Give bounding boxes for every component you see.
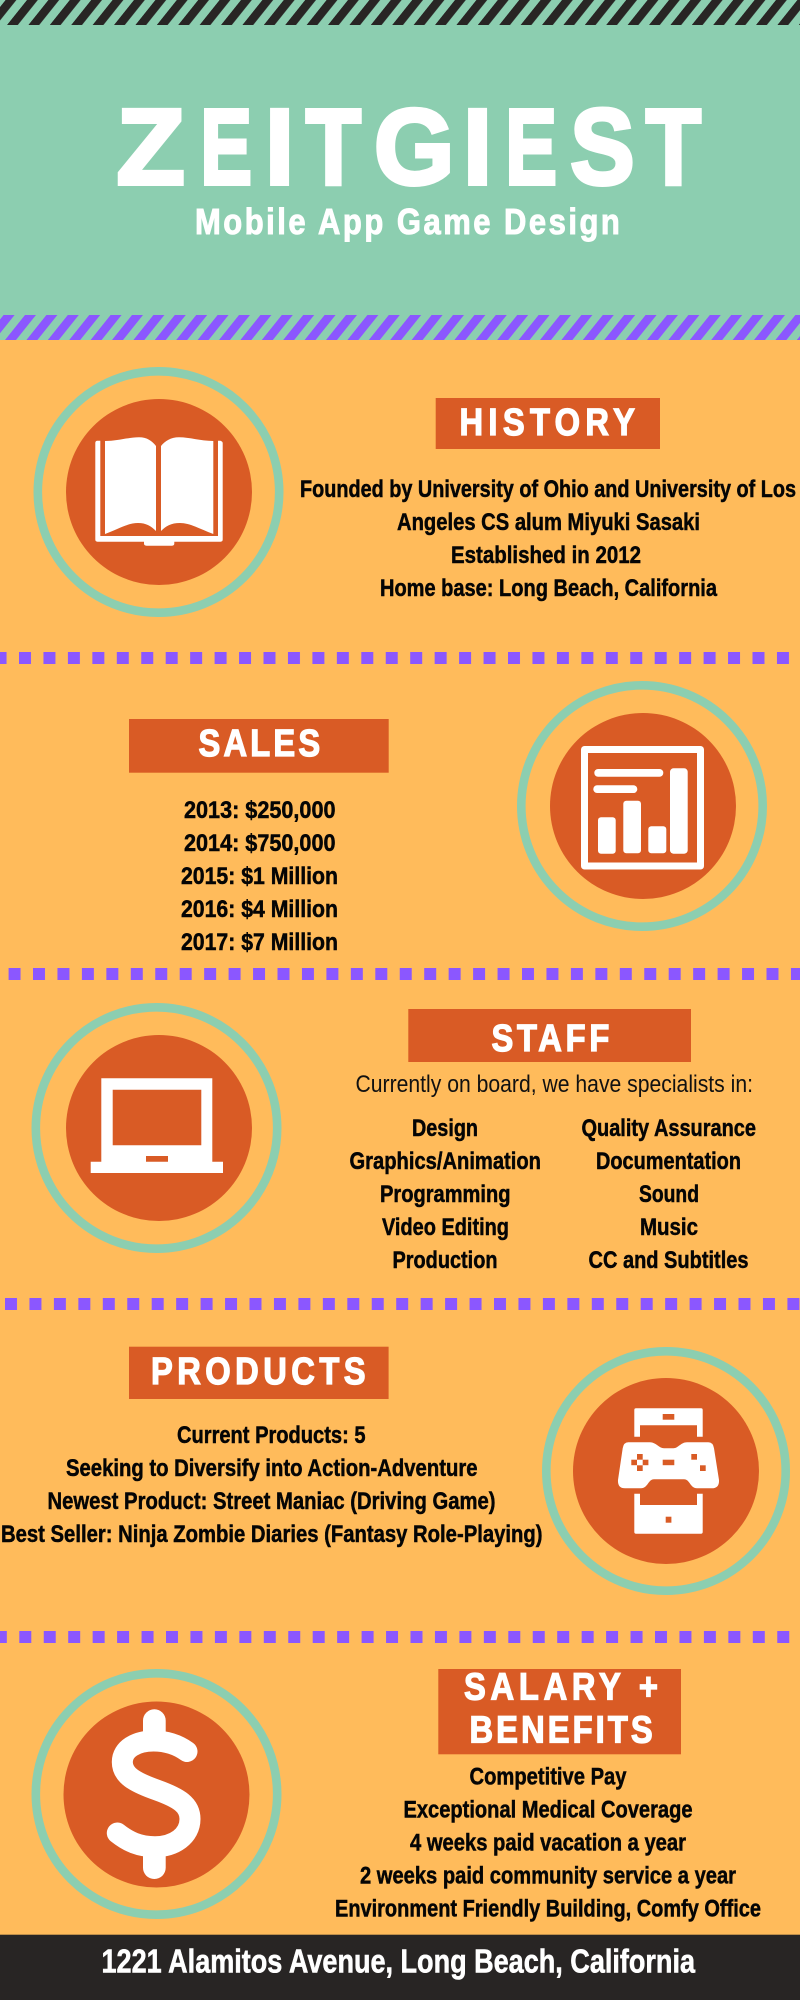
list: staff specialists right: CC and Subtitles xyxy=(588,1247,748,1274)
text: sales figures: 2017: $7 Million xyxy=(181,929,338,956)
panel: products xyxy=(1,1347,786,1591)
footer bar xyxy=(0,1935,800,2000)
title xyxy=(116,86,701,208)
heading: sales xyxy=(129,719,389,773)
title: E xyxy=(200,86,252,207)
text: products: Seeking to Diversify into Action-Adventure xyxy=(66,1455,478,1482)
header panel xyxy=(0,0,800,340)
heading: products: PRODUCTS xyxy=(151,1350,366,1393)
list: staff specialists left: Video Editing xyxy=(382,1214,509,1241)
text: history: Established in 2012 xyxy=(451,542,641,569)
text: history: Angeles CS alum Miyuki Sasaki xyxy=(397,509,700,536)
heading: history: HISTORY xyxy=(460,401,635,444)
heading: staff: STAFF xyxy=(492,1017,609,1060)
list: staff specialists right: Music xyxy=(640,1214,698,1241)
icon: laptop xyxy=(36,1007,277,1249)
title: Z xyxy=(116,87,185,208)
text: products xyxy=(1,1422,542,1548)
panel: staff xyxy=(36,1007,756,1274)
title: E xyxy=(505,86,557,207)
title: T xyxy=(646,88,701,208)
list: staff specialists left: Design xyxy=(412,1115,478,1142)
text: sales figures: 2016: $4 Million xyxy=(181,896,338,923)
panel: sales xyxy=(129,685,763,956)
list: staff specialists right: Sound xyxy=(639,1181,699,1208)
title: I xyxy=(265,87,294,207)
text: sales figures: 2014: $750,000 xyxy=(184,830,336,857)
heading: history xyxy=(436,398,660,449)
heading: salary + benefits xyxy=(438,1665,681,1754)
text: salary and benefits: Competitive Pay xyxy=(470,1763,627,1790)
heading: staff xyxy=(408,1009,691,1062)
icon: phone with game controller xyxy=(546,1351,786,1591)
heading: products xyxy=(129,1347,389,1399)
text: sales figures: 2015: $1 Million xyxy=(181,863,338,890)
icon: open book xyxy=(38,371,279,613)
text: salary and benefits: 4 weeks paid vacation a year xyxy=(410,1829,686,1856)
title: S xyxy=(570,86,635,207)
title: T xyxy=(306,88,361,208)
icon: bar chart report xyxy=(521,685,763,927)
panel: history xyxy=(38,371,796,613)
title: G xyxy=(374,87,454,207)
list: staff specialists right: Documentation xyxy=(596,1148,741,1175)
list: staff specialists left xyxy=(350,1115,541,1274)
title: I xyxy=(463,87,492,207)
subtitle: Mobile App Game Design xyxy=(195,203,620,243)
text: salary and benefits: Exceptional Medical Coverage xyxy=(404,1796,692,1824)
text: history: Home base: Long Beach, California xyxy=(380,575,717,602)
list: staff specialists right: Quality Assurance xyxy=(582,1115,756,1142)
list: staff specialists left: Production xyxy=(392,1247,498,1274)
text: salary and benefits xyxy=(335,1763,761,1922)
list: staff specialists right xyxy=(582,1115,756,1274)
list: staff specialists left: Graphics/Animation xyxy=(350,1148,541,1175)
text: products: Current Products: 5 xyxy=(177,1422,366,1449)
text: products: Best Seller: Ninja Zombie Diaries (Fantasy Role-Playing) xyxy=(1,1521,542,1548)
panel: salary and benefits xyxy=(36,1665,761,1922)
text: sales figures xyxy=(181,797,338,956)
heading: sales: SALES xyxy=(198,722,320,765)
text: sales figures: 2013: $250,000 xyxy=(184,797,336,824)
icon: dollar sign xyxy=(36,1673,277,1915)
heading: salary + benefits: SALARY + xyxy=(464,1665,658,1708)
list: staff specialists left: Programming xyxy=(380,1181,510,1208)
heading: salary + benefits: BENEFITS xyxy=(470,1708,653,1751)
text: history xyxy=(300,476,796,602)
text: products: Newest Product: Street Maniac (Driving Game) xyxy=(48,1488,496,1515)
